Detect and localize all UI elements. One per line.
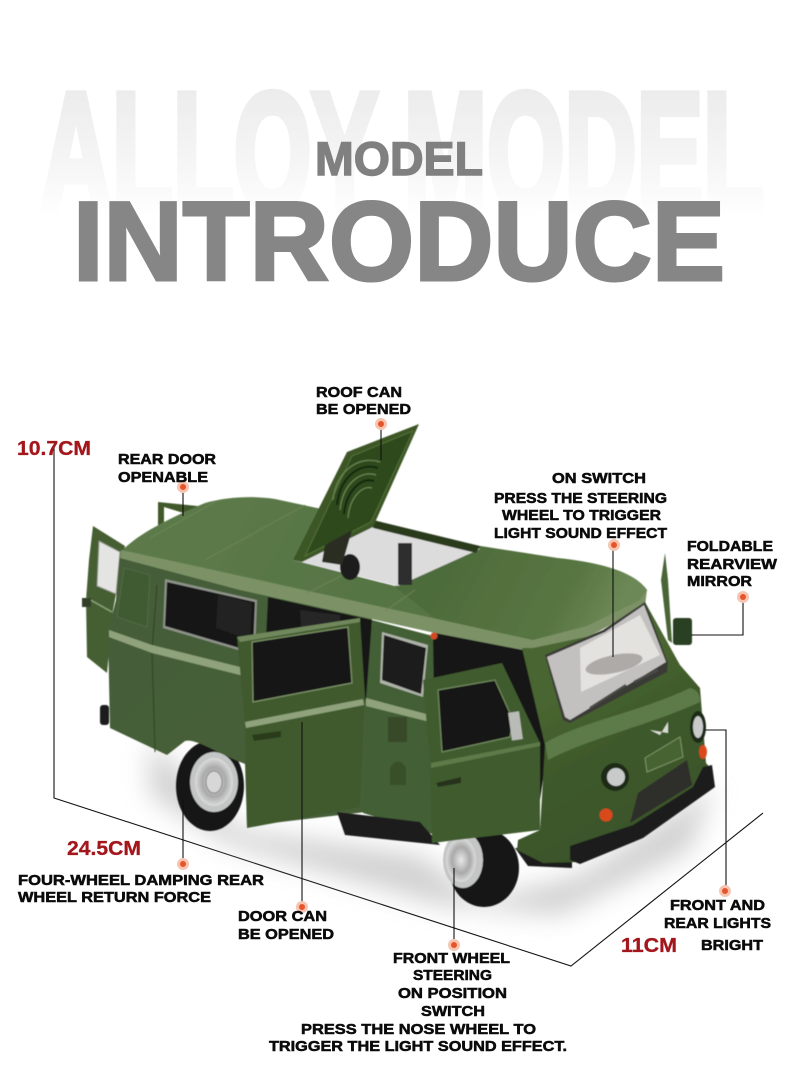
callout line: rear door (182, 487, 184, 516)
van side body (108, 553, 372, 826)
label: front and rear lights bright: BRIGHT (701, 937, 763, 954)
label: on switch: WHEEL TO TRIGGER (502, 507, 661, 524)
heading: MODEL: MODEL (315, 132, 483, 185)
roof opening (293, 520, 480, 586)
callout line: rear wheel (182, 800, 184, 864)
dimension: width: 11CM (621, 935, 677, 957)
label: front and rear lights bright: FRONT AND (670, 897, 765, 914)
label: on switch: PRESS THE STEERING (494, 490, 667, 507)
callout line: on switch (612, 545, 614, 657)
heading: INTRODUCE: INTRODUCE (73, 179, 725, 304)
label: front wheel steering: TRIGGER THE LIGHT SOUND EFFECT. (269, 1038, 567, 1055)
dimension lines (54, 447, 763, 966)
roof (120, 497, 647, 652)
callout line: front wheel (453, 868, 455, 945)
far rear door (158, 502, 207, 527)
label: door can be opened: DOOR CAN (238, 908, 327, 925)
label: roof can be opened: ROOF CAN (316, 384, 402, 401)
front door open (423, 663, 540, 843)
label: four-wheel damping (18, 872, 264, 906)
side window (163, 579, 257, 655)
headlights (600, 711, 707, 822)
label: foldable rearview mirror: REARVIEW (687, 556, 778, 573)
label: on switch: ON SWITCH (552, 470, 646, 487)
callout line: door (301, 722, 303, 907)
label: front and rear lights bright: REAR LIGHTS (664, 915, 771, 932)
label: front wheel steering: PRESS THE NOSE WHEEL TO (301, 1021, 536, 1038)
rear side upper panel (117, 568, 150, 627)
label: on switch (494, 470, 667, 542)
rear bumper stub (100, 705, 109, 725)
folded mirror (661, 553, 692, 645)
ground shadow (150, 740, 715, 915)
front wheel (443, 829, 519, 907)
label: roof can be opened (316, 384, 411, 418)
label: front wheel steering: STEERING (413, 967, 492, 984)
interior behind door (263, 597, 372, 700)
label: four-wheel damping: WHEEL RETURN FORCE (18, 889, 211, 906)
label: foldable rearview mirror (687, 538, 778, 590)
cab front body (517, 602, 712, 863)
dimension: height: 10.7CM (17, 438, 91, 460)
label: four-wheel damping: FOUR-WHEEL DAMPING REAR (18, 872, 264, 889)
panel seam (152, 585, 157, 752)
label: rear door openable: REAR DOOR (118, 451, 216, 468)
side panel behind door (363, 620, 438, 835)
cab interior (430, 622, 548, 800)
windshield (545, 602, 668, 723)
label: foldable rearview mirror: MIRROR (687, 573, 752, 590)
label: front and rear lights bright (664, 897, 771, 954)
callout line: mirror (691, 597, 743, 635)
rear wheel (176, 741, 244, 831)
label: rear door openable (118, 451, 216, 486)
label: front wheel steering: SWITCH (421, 1003, 485, 1020)
label: roof can be opened: BE OPENED (316, 401, 411, 418)
label: door can be opened (238, 908, 334, 943)
logo (650, 722, 668, 735)
label: rear door openable: OPENABLE (118, 469, 208, 486)
middle door open (237, 618, 365, 828)
label: front wheel steering: FRONT WHEEL (393, 950, 510, 967)
dimension: length: 24.5CM (67, 838, 141, 860)
rear door open (82, 526, 125, 673)
callout line: roof (380, 424, 382, 460)
label: foldable rearview mirror: FOLDABLE (687, 538, 773, 555)
label: front wheel steering (269, 950, 567, 1055)
label: door can be opened: BE OPENED (238, 926, 334, 943)
open roof hatch (293, 424, 419, 565)
toy van (82, 424, 715, 907)
label: on switch: LIGHT SOUND EFFECT (494, 525, 667, 542)
grille (630, 737, 692, 823)
callout line: lights (705, 730, 726, 891)
label: front wheel steering: ON POSITION (398, 985, 507, 1002)
marker dots (177, 418, 749, 951)
side stripe (109, 630, 262, 680)
chassis (337, 812, 572, 868)
front bumper (570, 765, 715, 864)
